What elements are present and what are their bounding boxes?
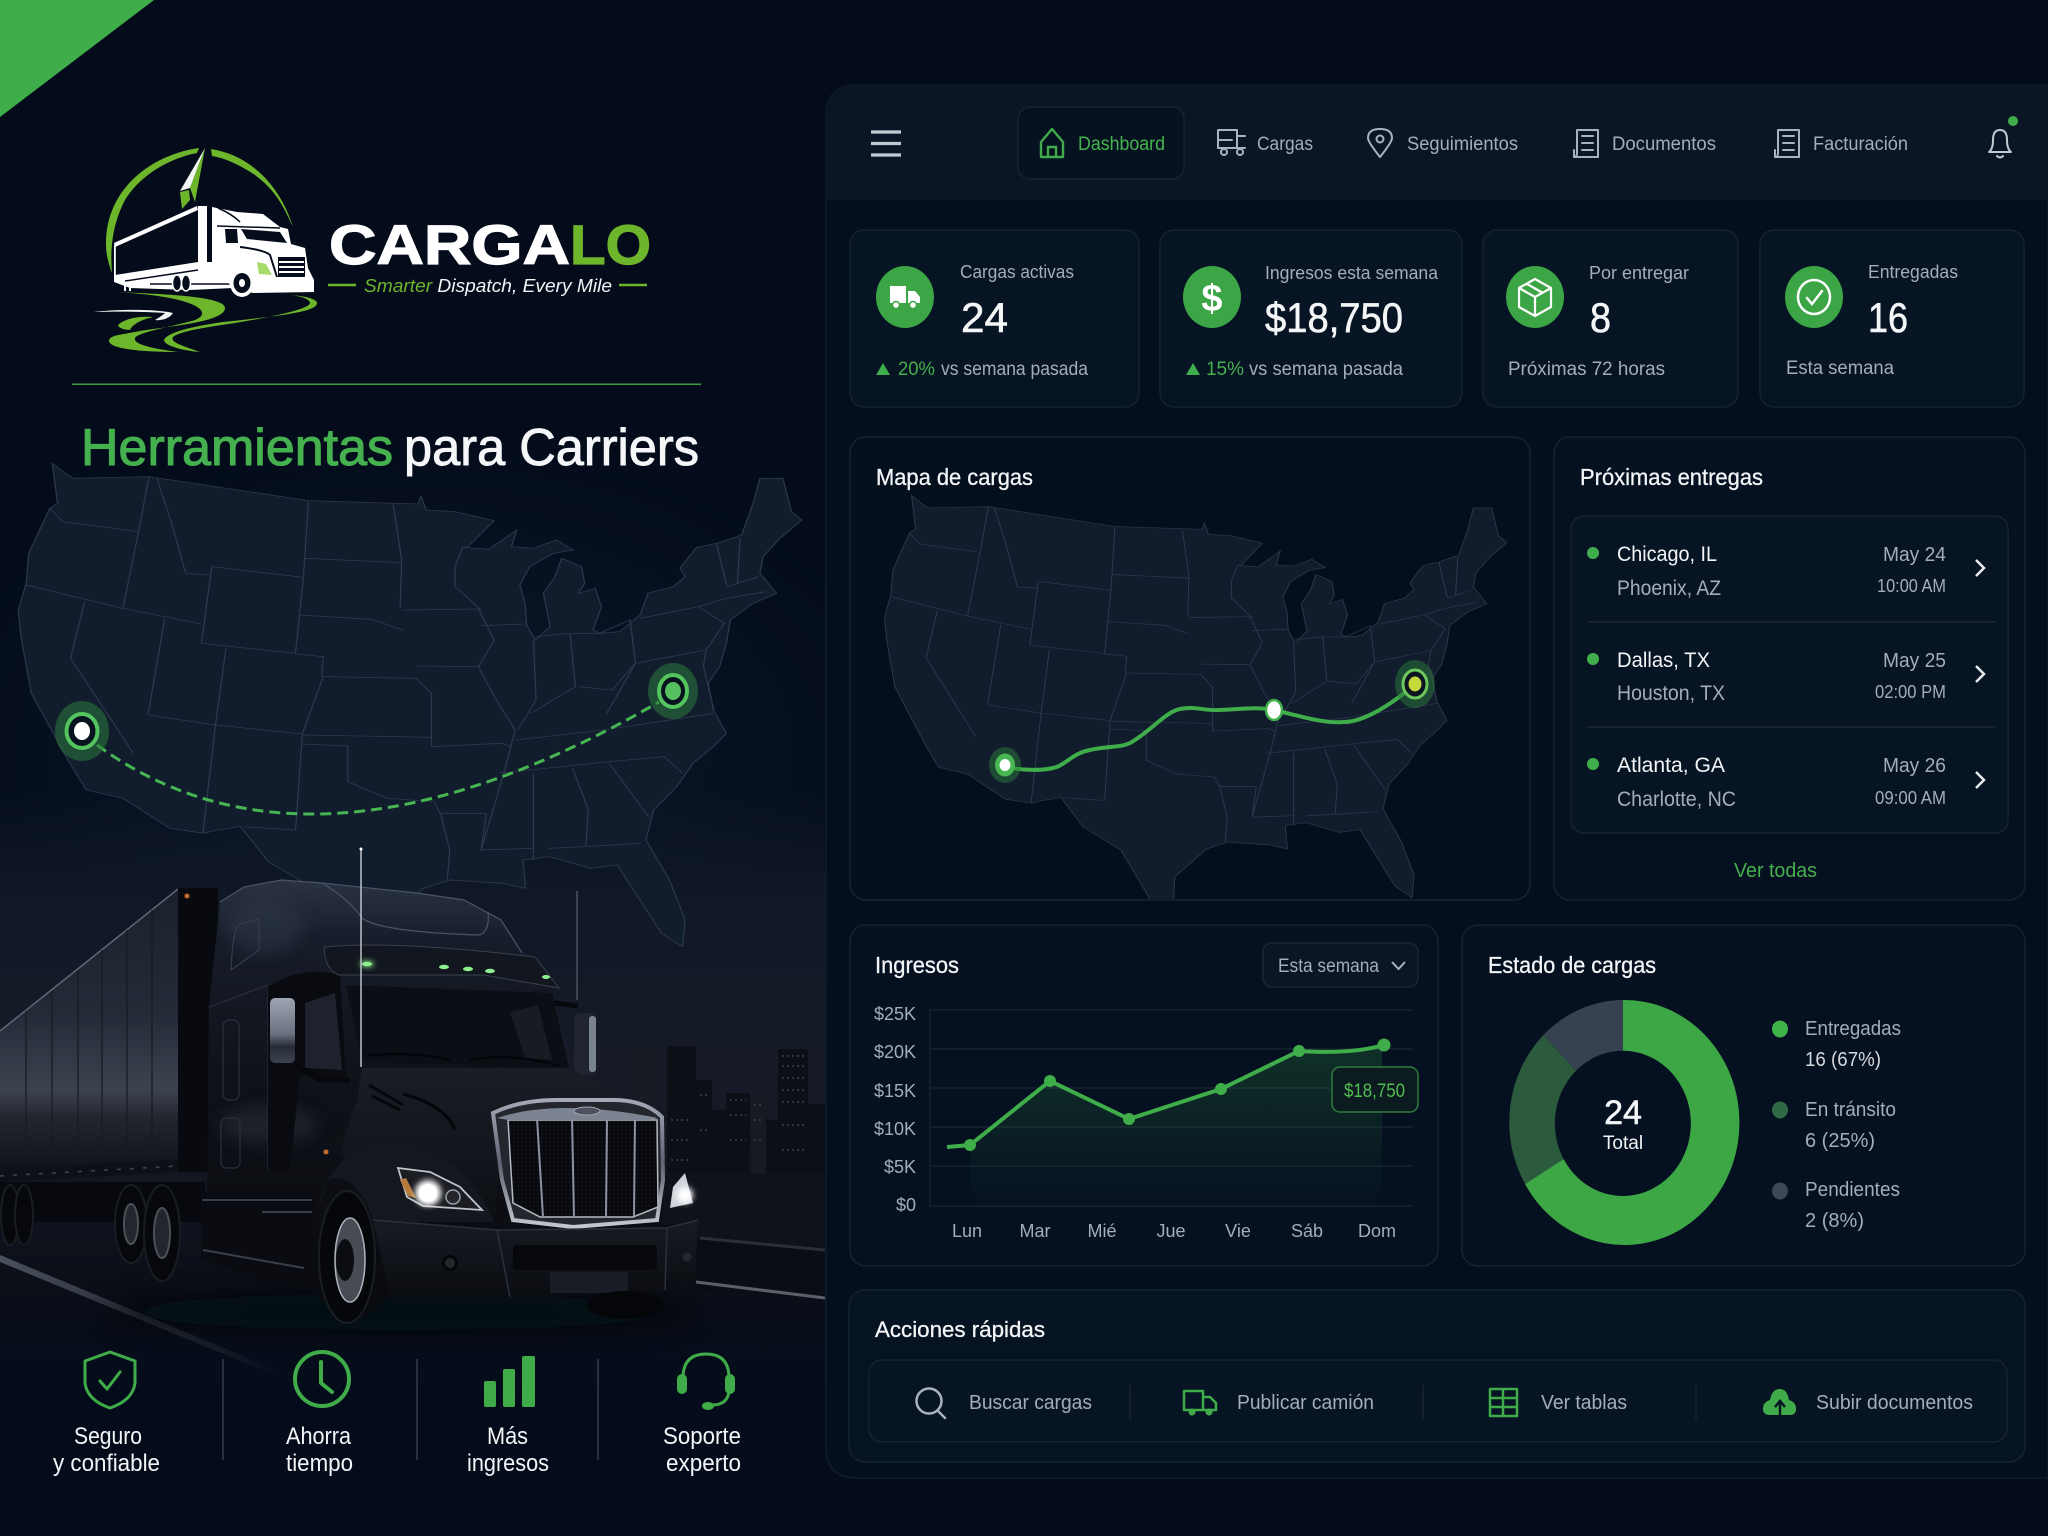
headlights: [398, 1168, 693, 1210]
logo compass needle: [180, 148, 205, 209]
KPI card: Entregadas: Esta semana: [1786, 358, 1894, 379]
action: Publicar camión: Publicar camión: [1237, 1392, 1374, 1414]
top navigation bar: [826, 85, 2048, 200]
feature label: experto: [666, 1450, 741, 1477]
side window: [305, 993, 342, 1070]
legend: Pendientes: 2 (8%): [1805, 1210, 1864, 1232]
feature label: Soporte: [663, 1423, 741, 1450]
action: Buscar cargas: [916, 1388, 1092, 1418]
delivery: Atlanta to Charlotte: Atlanta, GA: [1617, 754, 1725, 777]
logo wordmark: [329, 213, 651, 276]
KPI card: Ingresos esta semana: Ingresos esta semana: [1265, 263, 1439, 283]
donut center total: 24: [1604, 1094, 1642, 1132]
nav: Seguimientos: [1368, 129, 1518, 157]
heading: Estado de cargas: [1488, 952, 1656, 978]
delta: vs semana pasada: [941, 359, 1088, 380]
logo road swoosh: [94, 292, 317, 352]
icon: dollar in circle: $: [1201, 278, 1223, 320]
pin: destination: [648, 663, 698, 719]
delta: [876, 359, 1088, 380]
heading: Ingresos: [875, 952, 959, 978]
y axis labels: $0: [896, 1195, 916, 1215]
KPI card: Entregadas: Entregadas: [1868, 262, 1958, 282]
panel: Acciones rápidas: [849, 1290, 2025, 1462]
nav: Documentos: [1574, 130, 1716, 157]
delivery: Atlanta to Charlotte: May 26: [1883, 755, 1946, 777]
heading: Herramientas para Carriers: para Carriers: [404, 419, 699, 477]
dashed route: [97, 702, 659, 814]
donut chart: [1509, 1000, 1739, 1245]
nav: Dashboard active: Dashboard: [1078, 134, 1165, 155]
pin: origin: [55, 701, 109, 761]
rear wheels: [1, 1185, 180, 1281]
delivery: Dallas to Houston: May 25: [1883, 650, 1946, 672]
windshield: [346, 985, 569, 1068]
action: Publicar camión: [1184, 1391, 1374, 1416]
donut center total: Total: [1603, 1133, 1643, 1154]
y axis labels: $15K: [874, 1081, 916, 1101]
nav: Facturación: Facturación: [1813, 134, 1908, 155]
nav: Dashboard active: [1018, 107, 1184, 179]
hood vent: [369, 1085, 455, 1130]
dropdown: Esta semana: [1263, 943, 1418, 987]
x axis labels: Vie: [1225, 1221, 1251, 1241]
dropdown: Esta semana: Esta semana: [1278, 956, 1379, 977]
heading: Herramientas para Carriers: [81, 419, 699, 477]
feature label: [286, 1423, 353, 1477]
KPI card: Entregadas: 16: [1868, 294, 1908, 341]
logo truck: [114, 206, 314, 297]
icon: headset: [677, 1354, 735, 1410]
x axis labels: Dom: [1358, 1221, 1396, 1241]
y axis labels: $20K: [874, 1042, 916, 1062]
y axis labels: [874, 1004, 916, 1215]
trailer: [0, 888, 218, 1222]
legend: Entregadas: Entregadas: [1805, 1018, 1901, 1040]
x axis labels: [952, 1221, 1396, 1241]
icon: shield: [85, 1352, 135, 1408]
logo ring: [106, 148, 293, 273]
revenue line: [947, 1045, 1384, 1147]
delivery: Atlanta to Charlotte: 09:00 AM: [1875, 788, 1946, 808]
cab roof highlights: [220, 880, 522, 953]
delivery: Chicago to Phoenix: 10:00 AM: [1877, 576, 1946, 596]
KPI card: Ingresos esta semana: [1160, 230, 1462, 407]
cab reflections: [220, 897, 316, 1143]
legend: Pendientes: Pendientes: [1805, 1179, 1900, 1201]
icon: dollar in circle: [1183, 266, 1241, 328]
y axis labels: $5K: [884, 1157, 916, 1177]
feature label: Más: [487, 1423, 528, 1450]
KPI card: Por entregar: Próximas 72 horas: [1508, 359, 1665, 380]
heading: Herramientas para Carriers: Herramientas: [81, 419, 393, 477]
cab sleeper window: [231, 919, 259, 970]
feature label: ingresos: [467, 1450, 549, 1477]
hero truck: [0, 848, 700, 1330]
feature label: [53, 1423, 160, 1477]
feature: Ahorra tiempo: [286, 1352, 353, 1477]
feature label: Seguro: [74, 1423, 142, 1450]
fender: [318, 1141, 494, 1222]
side mirrors: [270, 998, 596, 1080]
legend: Pendientes: [1772, 1179, 1900, 1232]
cab body: [201, 880, 698, 1320]
delta: 15%: [1206, 359, 1244, 380]
feature: Más ingresos: [467, 1356, 549, 1477]
data points: [964, 1038, 1390, 1151]
delivery: Dallas to Houston: Dallas, TX: [1617, 649, 1710, 672]
sun visor: [324, 945, 559, 988]
icon: package in circle: [1506, 266, 1564, 328]
front wheel: [319, 1191, 375, 1323]
green corner accent: [0, 0, 154, 117]
delivery: Dallas to Houston: [1587, 649, 1984, 705]
icon: hamburger menu: [871, 132, 901, 155]
area fill: [970, 1046, 1382, 1206]
line chart: [874, 1004, 1418, 1241]
action: Subir documentos: [1763, 1389, 1973, 1415]
tooltip value: [1332, 1067, 1418, 1112]
KPI card: Cargas activas: Cargas activas: [960, 262, 1074, 282]
delivery: Chicago to Phoenix: Chicago, IL: [1617, 543, 1717, 566]
panel: Ingresos: [850, 925, 1438, 1266]
nav: Cargas: Cargas: [1257, 134, 1313, 155]
x axis labels: Jue: [1156, 1221, 1186, 1241]
map: USA route, left side: [18, 463, 802, 953]
KPI card: Por entregar: 8: [1590, 294, 1611, 341]
feature: Seguro y confiable: [53, 1352, 160, 1477]
delivery: Atlanta to Charlotte: Charlotte, NC: [1617, 788, 1736, 811]
nav: Seguimientos: Seguimientos: [1407, 134, 1518, 155]
delivery: Chicago to Phoenix: [1587, 543, 1984, 600]
nav: Cargas: [1218, 130, 1313, 155]
legend: Entregadas: [1772, 1018, 1901, 1071]
bumper: [373, 1220, 698, 1319]
donut center total: [1603, 1094, 1643, 1154]
road markings: [0, 1255, 825, 1376]
legend: En tránsito: En tránsito: [1805, 1099, 1896, 1121]
map: USA: [885, 495, 1507, 903]
icon: truck in circle: [876, 266, 934, 328]
side steps: [201, 1150, 328, 1288]
icon: notification bell: [1989, 116, 2018, 158]
feature label: tiempo: [286, 1450, 353, 1477]
x axis labels: Sáb: [1291, 1221, 1323, 1241]
x axis labels: Lun: [952, 1221, 982, 1241]
delta: [1186, 359, 1403, 380]
icon: check in circle: [1785, 266, 1843, 328]
feature label: [467, 1423, 549, 1477]
KPI card: Ingresos esta semana: $18,750: [1265, 294, 1403, 341]
truck shadow: [100, 1294, 700, 1330]
panel: Próximas entregas: [1554, 437, 2025, 900]
delivery: Chicago to Phoenix: May 24: [1883, 544, 1946, 566]
action: Buscar cargas: Buscar cargas: [969, 1392, 1092, 1414]
cab side door: [209, 985, 288, 1170]
action: Subir documentos: Subir documentos: [1816, 1392, 1973, 1414]
logo: Cargalo: [94, 148, 651, 352]
tooltip value: $18,750: [1344, 1081, 1405, 1102]
panel: Mapa de cargas: [850, 437, 1530, 903]
delta: 20%: [898, 359, 935, 380]
heading: Mapa de cargas: [876, 464, 1033, 490]
legend: Entregadas: 16 (67%): [1805, 1049, 1881, 1071]
icon: clock: [295, 1352, 349, 1406]
logo tagline: Smarter Dispatch, Every Mile: [364, 276, 612, 296]
delta: vs semana pasada: [1249, 359, 1403, 380]
antennas: [360, 848, 577, 1067]
feature: Soporte experto: [663, 1354, 741, 1477]
x axis labels: Mar: [1020, 1221, 1051, 1241]
dark cab arch: [268, 972, 346, 1170]
action: Ver tablas: [1490, 1389, 1627, 1416]
grille: [493, 1100, 663, 1227]
delivery: Atlanta to Charlotte: [1587, 754, 1984, 811]
logo wordmark: CARGA: [329, 213, 570, 276]
city skyline: [630, 1046, 825, 1176]
feature label: y confiable: [53, 1450, 160, 1477]
heading: Próximas entregas: [1580, 464, 1763, 490]
KPI card: Entregadas: [1760, 230, 2024, 407]
pin: end: [1395, 660, 1435, 708]
delivery: Chicago to Phoenix: Phoenix, AZ: [1617, 577, 1721, 600]
link: Ver todas: Ver todas: [1734, 860, 1817, 882]
icon: bars: [484, 1356, 535, 1407]
logo wordmark: LO: [570, 213, 651, 276]
dashboard panel: [826, 85, 2048, 1478]
KPI card: Cargas activas: 24: [961, 294, 1008, 341]
route line: [1005, 684, 1415, 770]
KPI card: Por entregar: [1483, 230, 1738, 407]
KPI card: Por entregar: Por entregar: [1589, 263, 1689, 283]
pin: start: [989, 747, 1021, 783]
nav: Facturación: [1775, 130, 1908, 157]
heading: Acciones rápidas: [875, 1317, 1045, 1342]
green marker lights: [360, 961, 550, 979]
delivery: Dallas to Houston: 02:00 PM: [1875, 682, 1946, 702]
feature label: Ahorra: [286, 1423, 352, 1450]
delivery: Dallas to Houston: Houston, TX: [1617, 682, 1725, 705]
panel: Estado de cargas: [1462, 925, 2025, 1266]
action: Ver tablas: Ver tablas: [1541, 1392, 1627, 1414]
night sky backdrop: [0, 790, 825, 1400]
legend: En tránsito: 6 (25%): [1805, 1130, 1875, 1152]
highway guard rail: [640, 1174, 825, 1300]
legend: En tránsito: [1772, 1099, 1896, 1152]
y axis labels: $10K: [874, 1119, 916, 1139]
hood: [340, 1068, 663, 1220]
x axis labels: Mié: [1087, 1221, 1117, 1241]
KPI card: Cargas activas: [850, 230, 1139, 407]
nav: Documentos: Documentos: [1612, 134, 1716, 155]
y axis labels: $25K: [874, 1004, 916, 1024]
legend: [1772, 1018, 1901, 1232]
pin: mid stop: [1266, 700, 1282, 720]
feature label: [663, 1423, 741, 1477]
